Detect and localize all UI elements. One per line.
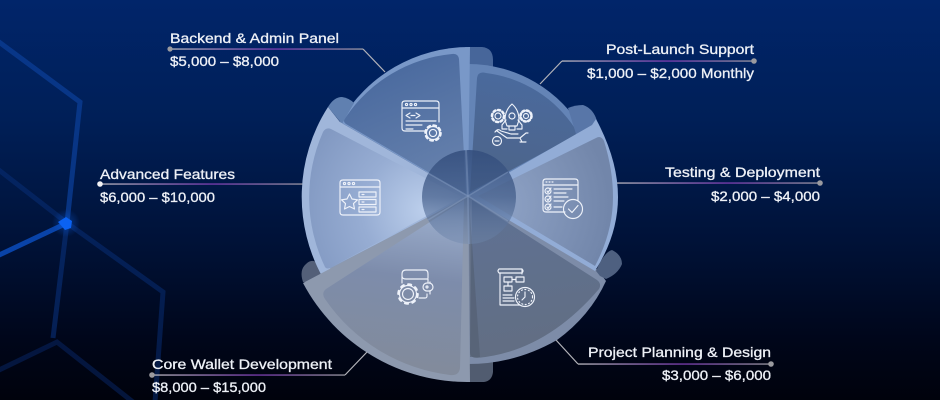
wedge: Post-Launch Support	[468, 64, 584, 196]
fold tab: right lower	[596, 250, 622, 279]
label: Post-Launch Support	[587, 41, 757, 81]
wedge: Backend & Admin Panel	[340, 47, 470, 196]
label: Testing & Deployment: Testing & Deployment	[665, 164, 820, 180]
label: Post-Launch Support: $1,000 – $2,000 Monthly	[587, 65, 754, 81]
hexagon line pattern	[0, 39, 163, 400]
label: Backend & Admin Panel: Backend & Admin Panel	[170, 30, 339, 46]
leader lines	[100, 48, 820, 376]
label: Advanced Features	[97, 166, 235, 205]
fold tab: upper left	[328, 97, 354, 124]
wedge: Core Wallet Development	[303, 196, 470, 382]
fold tab: lower left	[302, 261, 326, 282]
label: Advanced Features: $6,000 – $10,000	[100, 189, 215, 205]
icon: code window with gear	[402, 101, 441, 141]
label: Core Wallet Development: $8,000 – $15,000	[152, 379, 266, 395]
label: Core Wallet Development	[149, 356, 332, 395]
center hub	[422, 150, 516, 244]
label: Testing & Deployment: $2,000 – $4,000	[711, 188, 820, 204]
wedge: Project Planning & Design	[468, 196, 606, 364]
icon: rocket in hand with gears	[492, 104, 532, 146]
fold tab: top	[465, 47, 493, 72]
fold tab: upper right	[568, 105, 600, 135]
icon: wallet with gear	[398, 270, 433, 304]
label: Advanced Features: Advanced Features	[100, 166, 235, 182]
label: Project Planning & Design: Project Planning & Design	[588, 344, 771, 360]
icon: project plan and clock	[498, 269, 534, 306]
label: Project Planning & Design: $3,000 – $6,000	[662, 367, 771, 383]
icon: checklist window	[543, 179, 582, 218]
fold tab: bottom	[465, 360, 493, 382]
label: Post-Launch Support: Post-Launch Support	[606, 41, 754, 57]
icon: browser window with star	[340, 180, 380, 215]
label: Project Planning & Design	[588, 344, 774, 383]
label: Backend & Admin Panel	[167, 30, 339, 69]
label: Core Wallet Development: Core Wallet Development	[152, 356, 332, 372]
label: Testing & Deployment	[665, 164, 823, 204]
wedge: Testing & Deployment	[468, 119, 618, 271]
label: Backend & Admin Panel: $5,000 – $8,000	[170, 53, 279, 69]
wedge: Advanced Features	[302, 107, 468, 278]
